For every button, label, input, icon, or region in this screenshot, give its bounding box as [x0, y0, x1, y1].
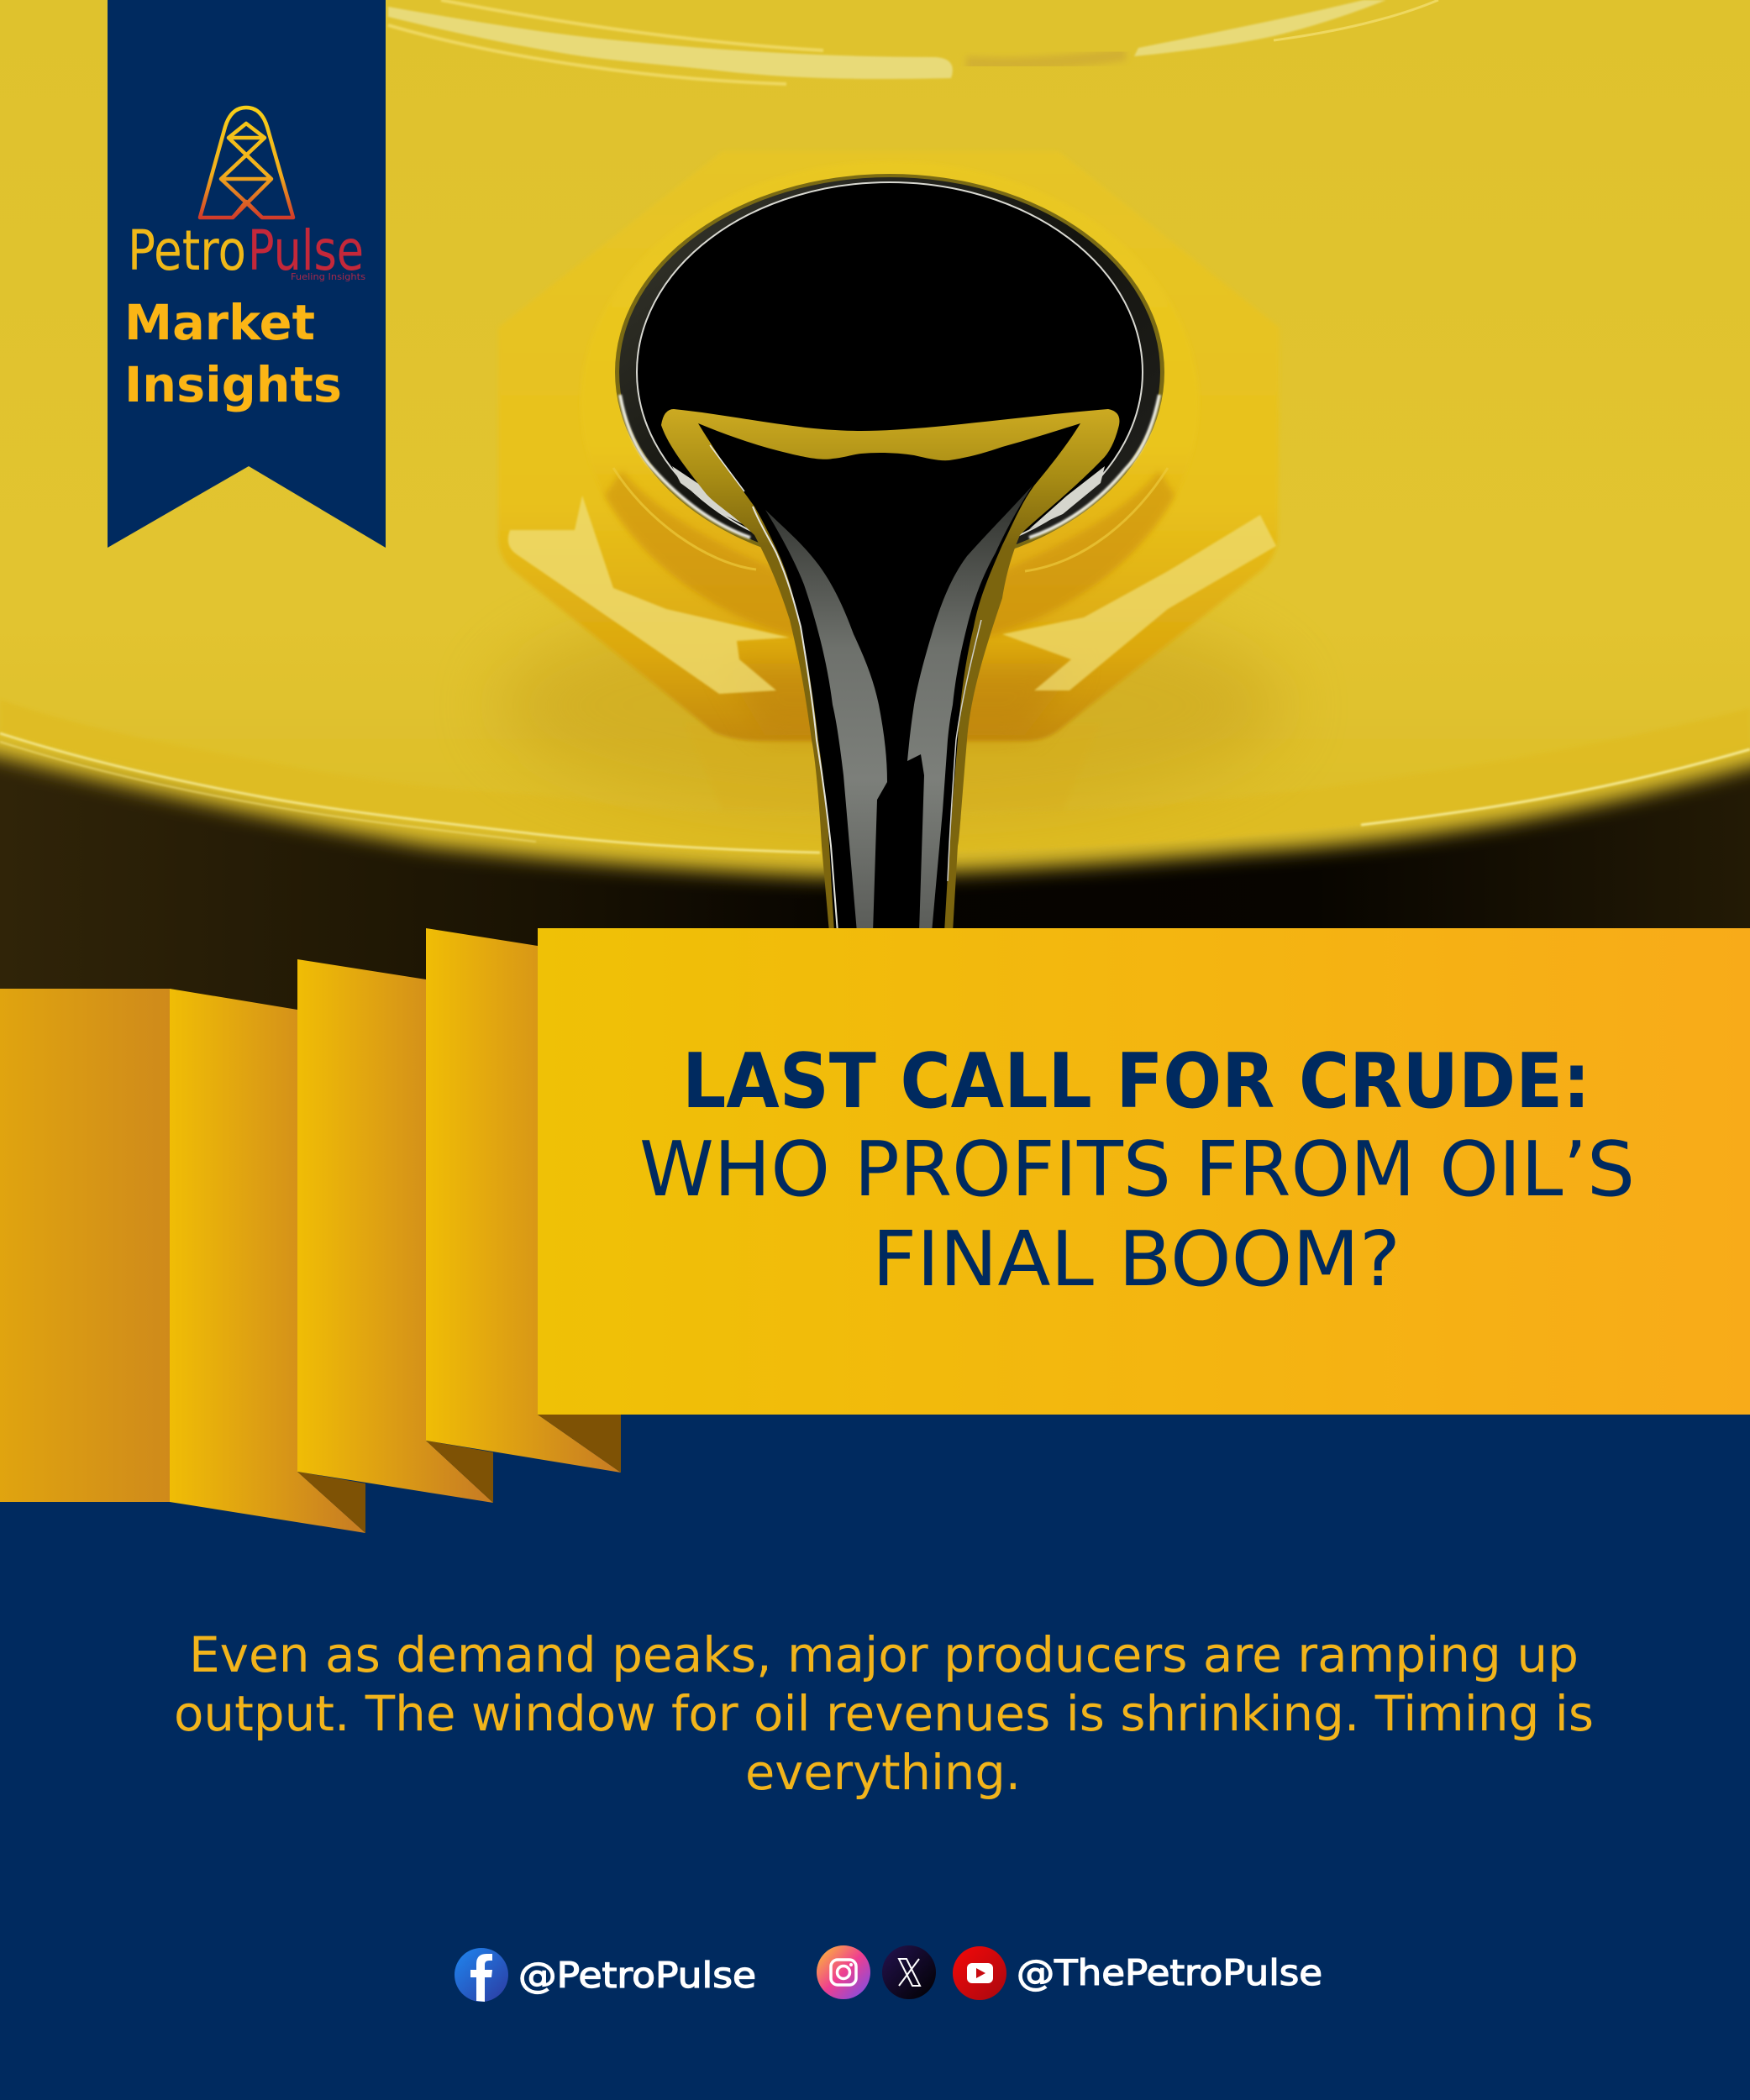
logo wordmark: Fueling Insights [291, 271, 365, 282]
icon: X [882, 1945, 936, 1999]
top highlights [388, 7, 953, 79]
handle: instagram x youtube: @ThePetroPulse [1017, 1952, 1322, 1993]
nut glints [508, 496, 790, 694]
title: LAST CALL FOR CRUDE: [682, 1037, 1590, 1126]
logo wordmark: Petro [128, 218, 246, 283]
badge label: Insights [124, 356, 342, 413]
boss [581, 161, 1199, 645]
title banner [538, 928, 1750, 1415]
badge label: Market [124, 294, 315, 351]
social handles [455, 1945, 1322, 2002]
body paragraph: Even as demand peaks, major producers are ramping up [189, 1626, 1579, 1683]
icon: youtube [953, 1946, 1006, 2000]
icon: facebook [455, 1948, 508, 2002]
handle: facebook: @PetroPulse [518, 1955, 756, 1996]
ribbon banner [0, 928, 1750, 1533]
icon: PetroPulse derrick logo [200, 108, 293, 218]
title [639, 1037, 1635, 1304]
oil lip [661, 409, 1119, 932]
rim band [0, 700, 1750, 853]
body paragraph [174, 1626, 1594, 1801]
hole chrome ring [615, 174, 1164, 570]
oil stream [698, 423, 1080, 932]
dark smudge between top highlights [966, 54, 1126, 64]
faint trapezoid under nut [685, 722, 1101, 811]
navy background panel [0, 1260, 1750, 2100]
body paragraph: output. The window for oil revenues is shrinking. Timing is [174, 1685, 1594, 1742]
logo wordmark: Pulse [248, 218, 364, 283]
title: WHO PROFITS FROM OIL’S [639, 1126, 1635, 1214]
ribbon fold panels [0, 928, 621, 1533]
shading around nut [496, 596, 1285, 815]
body paragraph: everything. [745, 1744, 1021, 1801]
rim highlights [0, 733, 820, 853]
badge label [124, 294, 342, 413]
hero photo: yellow oil barrel pouring black oil [0, 0, 1750, 1260]
icon: instagram [817, 1945, 870, 1999]
shade on nut's lower face [723, 664, 1080, 735]
stream highlights [765, 510, 887, 932]
nut [498, 151, 1280, 741]
bookmark ribbon [108, 0, 386, 548]
title: FINAL BOOM? [872, 1215, 1401, 1304]
logo wordmark [128, 218, 365, 283]
boss lower shade [605, 470, 798, 638]
